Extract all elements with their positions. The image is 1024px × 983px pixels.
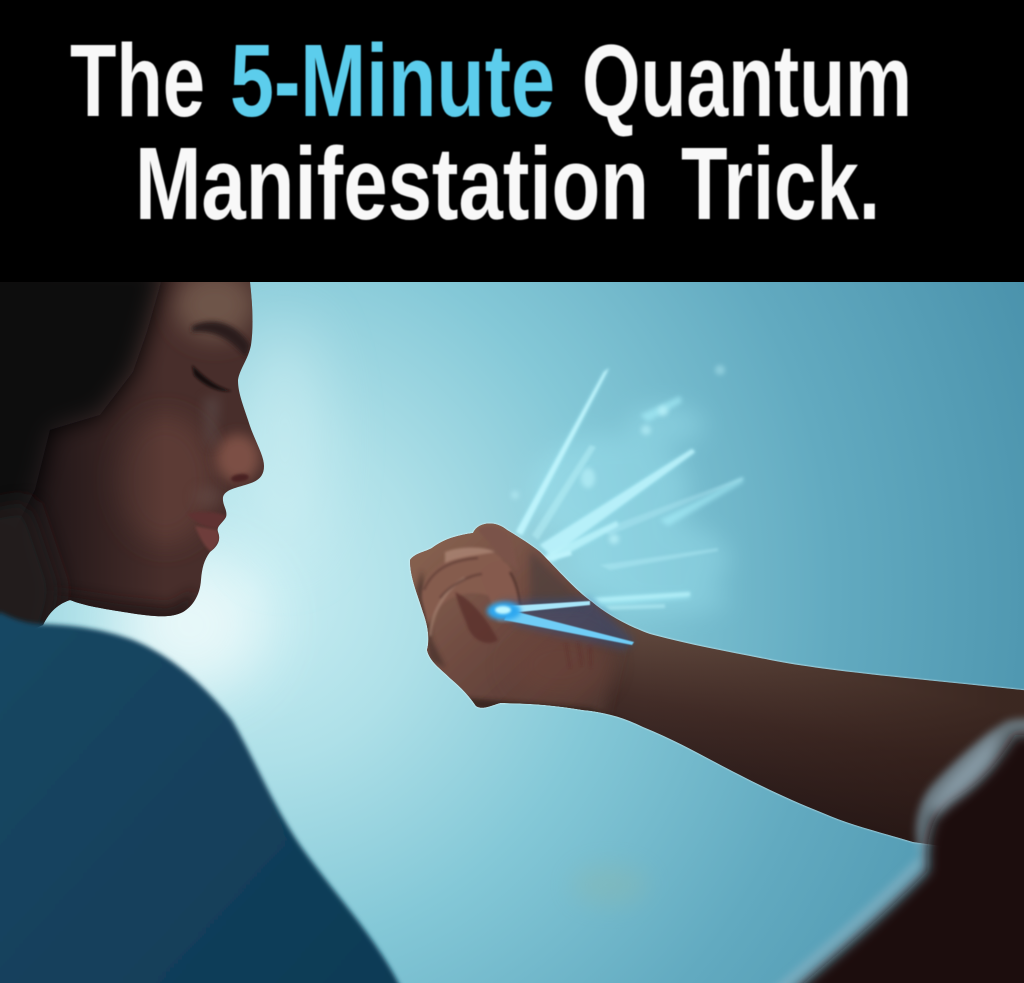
woman: head	[0, 282, 264, 628]
woman: shirt	[0, 612, 402, 983]
upper lip area	[201, 491, 218, 504]
eyebrow	[192, 321, 250, 358]
title banner	[0, 0, 1024, 282]
foreground hand	[765, 719, 1024, 983]
title line 2: Trick.	[681, 126, 880, 241]
title line 1: 5-Minute	[230, 23, 555, 138]
eye	[192, 365, 232, 391]
title line 1: The	[70, 23, 205, 138]
background glow	[0, 282, 1024, 983]
cheek warm	[115, 415, 215, 545]
fingers	[420, 546, 521, 644]
nostril	[231, 473, 249, 483]
nose bridge	[203, 398, 220, 440]
neck shadow	[0, 500, 60, 624]
bottom warm glow	[582, 870, 635, 900]
forearm and hand	[400, 510, 1024, 860]
title line 2: Manifestation	[135, 126, 649, 241]
face	[0, 282, 264, 628]
title line 1: Quantum	[582, 23, 912, 138]
title line 1	[70, 23, 912, 138]
light rays	[511, 365, 743, 614]
photo panel	[0, 262, 1024, 983]
glow spark on fist	[487, 598, 634, 650]
forehead light	[175, 270, 255, 340]
hair	[0, 282, 176, 506]
pale rim around arm	[410, 524, 1024, 860]
jaw	[49, 591, 198, 616]
side shading	[22, 384, 148, 625]
lips	[194, 512, 226, 530]
arm and fist	[400, 510, 1024, 860]
nose	[216, 434, 260, 482]
